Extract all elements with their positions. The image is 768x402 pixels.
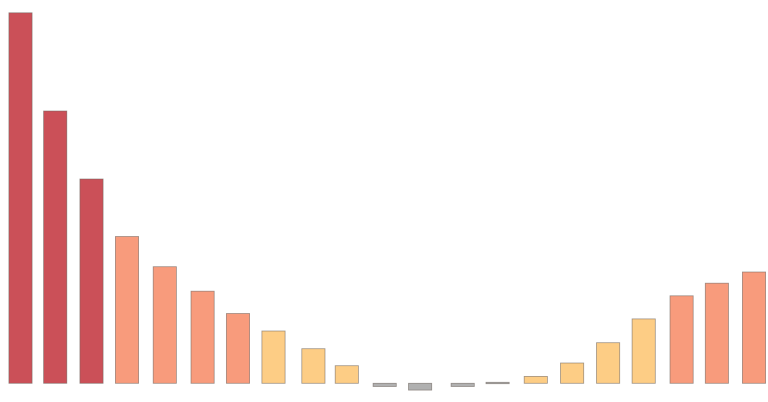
bar 9 — [302, 349, 325, 383]
bar 10 — [335, 366, 358, 383]
bar 7 — [226, 314, 250, 383]
bar 19 — [670, 296, 693, 383]
bar 5 — [153, 267, 176, 383]
bar 4 — [115, 236, 139, 383]
bar 1 — [9, 13, 32, 383]
bar 6 — [191, 291, 214, 383]
bar 18 — [632, 319, 655, 383]
bar 11 — [373, 383, 396, 386]
bar 2 — [44, 111, 67, 383]
bar 12 — [408, 383, 432, 390]
bar 17 — [596, 343, 620, 383]
bar 20 — [705, 283, 728, 383]
bar 16 — [560, 363, 584, 383]
bar 13 — [451, 383, 474, 386]
bar 8 — [262, 331, 285, 383]
bar 15 — [524, 376, 547, 383]
bar 21 — [742, 272, 766, 383]
bar 3 — [80, 179, 103, 383]
bar 14 — [486, 382, 509, 384]
